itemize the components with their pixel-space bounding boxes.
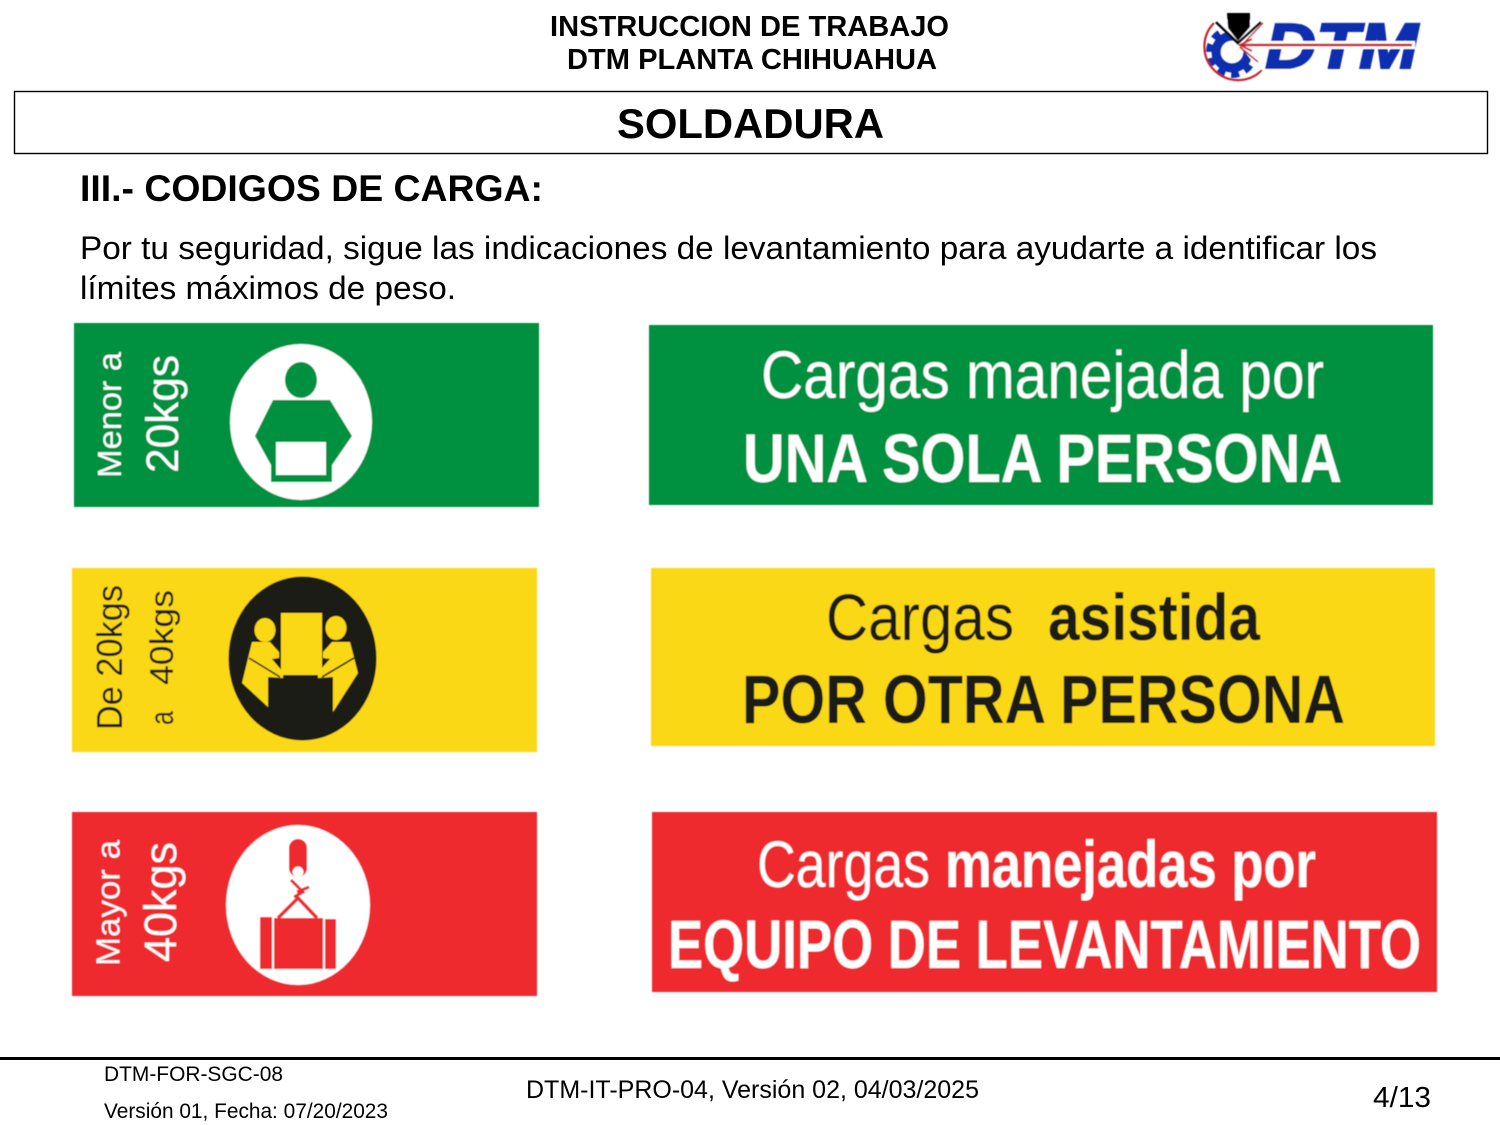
banner: SOLDADURA: SOLDADURA <box>617 100 884 147</box>
label: de 20kgs a 40kgs: De 20kgs <box>89 585 130 730</box>
heading: section: III.- CODIGOS DE CARGA: <box>80 168 543 209</box>
panel: green description sign <box>649 325 1433 505</box>
text block: page number: 4/13 <box>1373 1082 1431 1114</box>
panel: yellow description sign <box>651 568 1435 746</box>
text block: form code: Versión 01, Fecha: 07/20/2023 <box>104 1100 388 1123</box>
panel: red weight sign <box>72 812 537 996</box>
panel: red description sign: Cargas <box>757 827 930 901</box>
heading: document title <box>550 11 949 76</box>
icon: DTM logo: DTM <box>1265 10 1420 82</box>
label: mayor a 40kgs: 40kgs <box>135 842 186 962</box>
panel: green weight sign <box>74 323 539 507</box>
panel: yellow description sign: asistida <box>1048 580 1261 654</box>
panel: yellow description sign: Cargas <box>826 580 1014 654</box>
text block: form code <box>104 1063 388 1123</box>
panel: green description sign: UNA SOLA PERSONA <box>743 420 1342 497</box>
label: mayor a 40kgs <box>90 839 186 966</box>
panel: red description sign: manejadas por <box>945 827 1316 901</box>
label: de 20kgs a 40kgs: 40kgs <box>143 590 180 685</box>
footer <box>0 1057 1500 1123</box>
panel: green description sign: Cargas manejada por <box>761 338 1324 413</box>
label: de 20kgs a 40kgs: a <box>143 711 180 725</box>
label: de 20kgs a 40kgs <box>89 585 180 730</box>
banner: SOLDADURA <box>14 92 1488 154</box>
panel: red description sign <box>652 812 1437 992</box>
text block: form code: DTM-FOR-SGC-08 <box>104 1063 283 1086</box>
label: menor a 20kgs <box>91 351 188 478</box>
text block: document version: DTM-IT-PRO-04, Versión 02, 04/03/2025 <box>526 1076 979 1104</box>
icon: crane hook lifting load <box>226 825 370 985</box>
label: menor a 20kgs: 20kgs <box>137 355 188 473</box>
header <box>550 10 1420 82</box>
label: menor a 20kgs: Menor a <box>91 351 128 478</box>
text block: intro: Por tu seguridad, sigue las indicaciones de levantamiento para ayudarte a identificar los <box>80 230 1377 266</box>
icon: DTM logo <box>1204 10 1420 82</box>
label: mayor a 40kgs: Mayor a <box>90 839 126 966</box>
panel: yellow weight sign <box>72 568 537 752</box>
text block: intro: límites máximos de peso. <box>80 270 456 306</box>
heading: document title: INSTRUCCION DE TRABAJO <box>550 11 949 43</box>
panel: yellow description sign: POR OTRA PERSONA <box>742 661 1345 738</box>
icon: person carrying box <box>230 344 372 500</box>
icon: two people lifting box <box>228 576 376 740</box>
heading: document title: DTM PLANTA CHIHUAHUA <box>567 44 937 76</box>
text block: intro <box>80 230 1377 306</box>
